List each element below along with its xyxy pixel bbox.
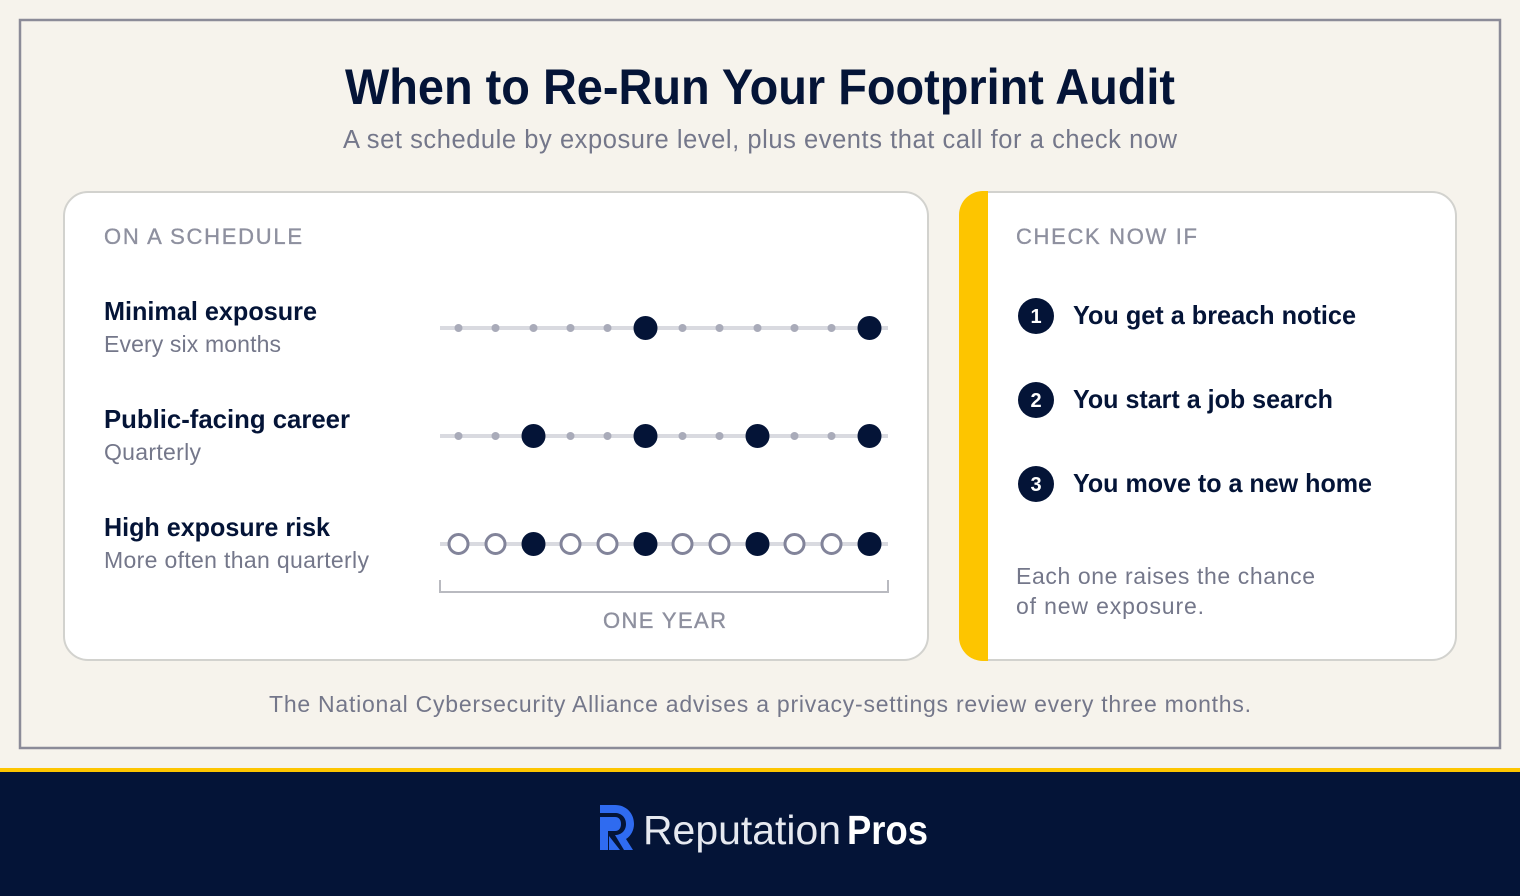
logo wordmark: Reputation xyxy=(643,807,841,853)
closing note xyxy=(1016,563,1315,619)
item 3 xyxy=(1018,466,1372,502)
item 1 xyxy=(1018,298,1356,334)
row label: public-facing career: Quarterly xyxy=(104,439,202,465)
footer band xyxy=(0,768,1520,896)
item 2: 2 xyxy=(1030,390,1042,412)
panel heading: on a schedule: ON A SCHEDULE xyxy=(104,224,302,249)
row label: public-facing career: Public-facing career xyxy=(104,404,350,434)
icon: R logo xyxy=(600,805,634,850)
row label: high exposure risk xyxy=(104,512,370,573)
panel: on a schedule xyxy=(64,192,928,660)
closing note: Each one raises the chance xyxy=(1016,563,1315,589)
footnote: The National Cybersecurity Alliance advises a privacy-settings review every three months. xyxy=(269,691,1251,717)
item 1: You get a breach notice xyxy=(1073,300,1356,330)
item 2 xyxy=(1018,382,1333,418)
row label: minimal exposure: Minimal exposure xyxy=(104,296,317,326)
one-year bracket xyxy=(440,580,888,592)
item 3: You move to a new home xyxy=(1073,468,1372,498)
one-year label: ONE YEAR xyxy=(603,608,726,633)
item 3: 3 xyxy=(1030,474,1042,496)
subtitle: A set schedule by exposure level, plus events that call for a check now xyxy=(343,126,1178,154)
timeline: minimal exposure xyxy=(440,316,888,340)
panel: check now if xyxy=(959,191,1456,661)
row label: high exposure risk: More often than quarterly xyxy=(104,547,370,573)
logo wordmark xyxy=(643,807,928,853)
row label: minimal exposure: Every six months xyxy=(104,331,281,357)
timeline: public-facing career xyxy=(440,424,888,448)
logo wordmark: Pros xyxy=(847,807,928,853)
panel heading: check now if: CHECK NOW IF xyxy=(1016,224,1197,249)
page frame xyxy=(20,20,1500,748)
title: When to Re-Run Your Footprint Audit xyxy=(345,59,1175,115)
item 1: 1 xyxy=(1030,306,1042,328)
yellow accent bar xyxy=(959,191,988,661)
row label: public-facing career xyxy=(104,404,350,465)
closing note: of new exposure. xyxy=(1016,593,1204,619)
row label: minimal exposure xyxy=(104,296,317,357)
row label: high exposure risk: High exposure risk xyxy=(104,512,331,542)
timeline: high exposure risk xyxy=(440,532,888,556)
item 2: You start a job search xyxy=(1073,384,1333,414)
